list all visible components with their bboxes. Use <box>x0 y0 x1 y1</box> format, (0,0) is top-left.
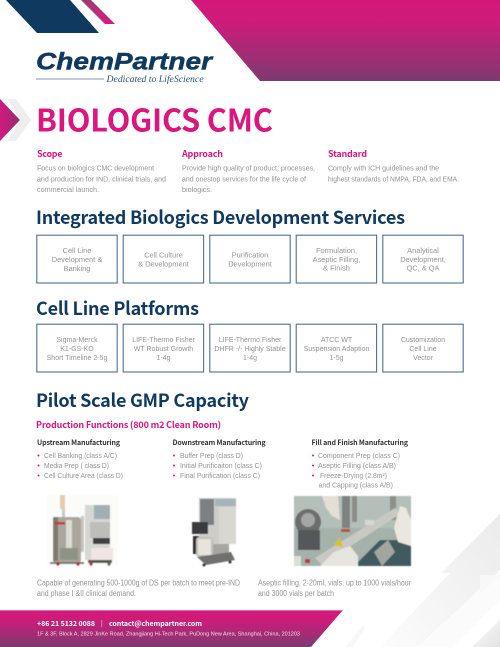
panel: service boxes: Cell Culture <box>144 250 183 260</box>
panel: platform boxes: 1-4g <box>156 355 171 362</box>
panel: service boxes: Development, <box>400 255 446 264</box>
panel: platform boxes: LIFE-Thermo Fisher <box>219 337 282 344</box>
footer contact: +86 21 5132 0088 <box>37 619 95 629</box>
panel: upstream: Upstream Manufacturing <box>37 438 121 448</box>
panel: downstream: Downstream Manufacturing <box>172 438 266 448</box>
logo: Dedicated to LifeScience <box>105 74 204 84</box>
panel: platform boxes: Suspension Adaption <box>304 346 369 353</box>
corner shape: magenta strip <box>81 0 115 24</box>
panel: platform boxes: DHFR -/- Highly Stable <box>214 346 286 353</box>
panel: platform boxes: LIFE-Thermo Fisher <box>132 337 195 344</box>
caption: fill and finish <box>258 578 411 598</box>
caption: fill and finish: and 3000 vials per batch <box>258 589 334 598</box>
panel: downstream <box>172 438 266 480</box>
panel: scope: Focus on biologics CMC development <box>37 164 154 172</box>
panel: fill and finish: and Capping (class A/B) <box>318 480 393 490</box>
panel: fill and finish: Fill and Finish Manufacturing <box>312 438 409 448</box>
panel: approach: and onestop services for the life cycle of <box>182 174 307 184</box>
heading: capacity: Pilot Scale GMP Capacity <box>36 387 250 413</box>
caption: fill and finish: Aseptic filling, 2-20ml, vials, up to 1000 vials/hour <box>258 578 411 588</box>
panel: service boxes: Development <box>228 260 272 268</box>
corner shape: navy parallelogram <box>6 0 99 33</box>
panel: upstream: Media Prep ( class D) <box>44 461 109 470</box>
panel: platform boxes <box>37 324 463 372</box>
panel: scope: Scope <box>37 147 62 160</box>
logo: ChemPartner <box>36 48 214 76</box>
panel: service boxes: Formulation, <box>316 246 357 255</box>
panel: scope: and production for IND, clinical trials, and <box>37 174 166 184</box>
panel: service boxes <box>37 235 463 283</box>
image: purification skid <box>192 498 236 566</box>
footer contact <box>37 619 300 638</box>
panel: service boxes: QC, & QA <box>407 264 439 272</box>
panel: platform boxes: 1-4g <box>243 355 257 362</box>
panel: standard: Comply with ICH guidelines and the <box>328 164 439 172</box>
heading: services: Integrated Biologics Development Services <box>36 204 405 230</box>
panel: fill and finish: Freeze-Drying (2.8m²) <box>320 471 387 480</box>
panel: service boxes: Development & <box>52 255 102 264</box>
caption: upstream: Capable of generating 500-1000g of DS per batch to meet pre-IND <box>37 578 240 588</box>
panel: platform boxes: Customization <box>401 337 445 344</box>
panel: scope: commercial launch. <box>37 185 99 194</box>
panel: service boxes: & Finish <box>323 264 350 272</box>
panel: downstream: Initial Purificaiton (class C) <box>180 461 262 470</box>
panel: downstream: Final Purification (class C) <box>180 471 260 480</box>
panel: standard: highest standards of NMPA, FDA, and EMA. <box>328 174 459 184</box>
image: aseptic filling line <box>294 496 411 566</box>
logo <box>36 48 214 84</box>
panel: fill and finish <box>312 438 409 490</box>
image: bioreactor <box>47 495 118 566</box>
panel: service boxes: Analytical <box>407 246 439 255</box>
panel: service boxes: Cell Line <box>63 246 91 255</box>
panel: standard: Standard <box>328 147 367 160</box>
panel: scope <box>37 147 166 194</box>
panel: approach <box>181 147 315 194</box>
panel: platform boxes: Sigma-Merck <box>56 337 98 344</box>
panel: platform boxes: Cell Line <box>409 346 437 353</box>
panel: platform boxes: Vector <box>413 355 434 362</box>
footer band <box>0 610 343 647</box>
heading: platforms: Cell Line Platforms <box>36 295 199 321</box>
subheading: production functions: Production Functions (800 m2 Clean Room) <box>36 418 221 431</box>
panel: fill and finish: Aseptic Filling (class A/B) <box>318 461 396 470</box>
panel: upstream: Cell Culture Area (class D) <box>44 471 123 480</box>
panel: standard <box>328 147 459 184</box>
panel: platform boxes: K1-GS-KO <box>60 346 94 353</box>
panel: platform boxes: 1-5g <box>329 355 344 362</box>
panel: downstream: Buffer Prep (class D) <box>180 451 243 460</box>
panel: platform boxes: ATCC WT <box>321 337 353 344</box>
title: BIOLOGICS CMC <box>36 96 273 140</box>
panel: platform boxes: Short Timeline 2-5g <box>47 355 107 362</box>
panel: approach: Provide high quality of product, processes, <box>182 164 315 172</box>
decorative background streaks <box>345 514 500 647</box>
panel: upstream <box>37 438 123 480</box>
panel: service boxes: & Development <box>138 260 189 268</box>
panel: platform boxes: WT Robust Growth <box>134 346 193 353</box>
icon: title chevron <box>0 99 31 141</box>
footer contact: 1F & 3F, Block A, 2829 JinKe Road, Zhangjiang Hi-Tech Park, PuDong New Area, Shanghai, China, 201203 <box>37 632 300 638</box>
panel: service boxes: Banking <box>64 264 90 273</box>
footer contact: contact@chempartner.com <box>109 619 202 629</box>
panel: fill and finish: Component Prep (class C) <box>318 451 400 460</box>
caption: upstream: and phase I &II clinical demand. <box>37 589 136 598</box>
caption: upstream <box>37 578 240 598</box>
panel: service boxes: Aseptic Filling, <box>313 255 360 264</box>
panel: approach: biologics. <box>182 185 212 194</box>
panel: upstream: Cell Banking (class A/C) <box>44 451 117 460</box>
panel: approach: Approach <box>181 147 223 160</box>
panel: service boxes: Purification <box>232 250 268 260</box>
header banner <box>191 0 500 81</box>
